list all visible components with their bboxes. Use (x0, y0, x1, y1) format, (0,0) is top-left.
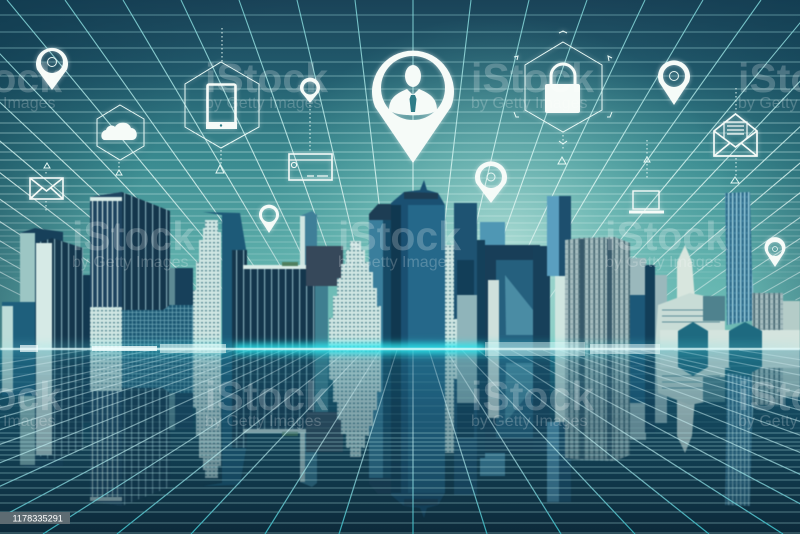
icon: credit card (289, 154, 332, 180)
icon: cloud in hexagon (97, 105, 144, 160)
icon: open envelope with letter (714, 114, 757, 156)
watermark: iStock by Getty Images: by Getty Images (471, 95, 588, 112)
icon: location pin top right (658, 60, 690, 105)
glowing horizon beam (0, 342, 800, 356)
icon: location pin centre (475, 161, 507, 203)
watermark: iStock by Getty Images: by Getty Images (72, 254, 188, 271)
icon: main person location pin (372, 51, 454, 163)
watermark: iStock by Getty Images: iStock (205, 373, 328, 419)
icon: small location pin on skyline (259, 205, 279, 233)
watermark: iStock by Getty Images: by Getty Images (205, 95, 322, 112)
sky background (0, 0, 800, 350)
watermark: iStock by Getty Images: by Getty Images (605, 254, 722, 271)
icon: tablet in hexagon (185, 62, 259, 148)
skyline reflection in water (2, 349, 800, 518)
icon: envelope left (30, 178, 63, 199)
watermark: iStock by Getty Images: iStock (72, 213, 195, 259)
connector triangles and dotted lines (44, 28, 739, 212)
image id label: 1178335291 (12, 514, 63, 524)
watermark: iStock by Getty Images: by Getty Images (205, 413, 322, 430)
watermark: iStock by Getty Images: iStock (205, 55, 328, 101)
watermark: iStock by Getty Images: iStock (338, 213, 461, 259)
icon: laptop (629, 191, 664, 212)
perspective grid: floor (0, 350, 800, 534)
icon: small location pin near tablet (300, 78, 320, 103)
watermark: iStock by Getty Images: iStock (471, 55, 594, 101)
watermark: iStock by Getty Images: by Getty Images (471, 413, 588, 430)
watermark: iStock by Getty Images (0, 55, 800, 430)
perspective grid: sky (0, 0, 800, 300)
icon: location pin top left (36, 48, 68, 90)
floor background (0, 349, 800, 534)
watermark: iStock by Getty Images: iStock (605, 213, 728, 259)
watermark: iStock by Getty Images: by Getty Images (338, 254, 454, 271)
image id label (0, 512, 70, 524)
watermark: iStock by Getty Images: iStock (471, 373, 594, 419)
icon: padlock in hexagon (514, 31, 612, 144)
icon: small location pin right (764, 237, 786, 267)
city skyline (2, 180, 800, 349)
